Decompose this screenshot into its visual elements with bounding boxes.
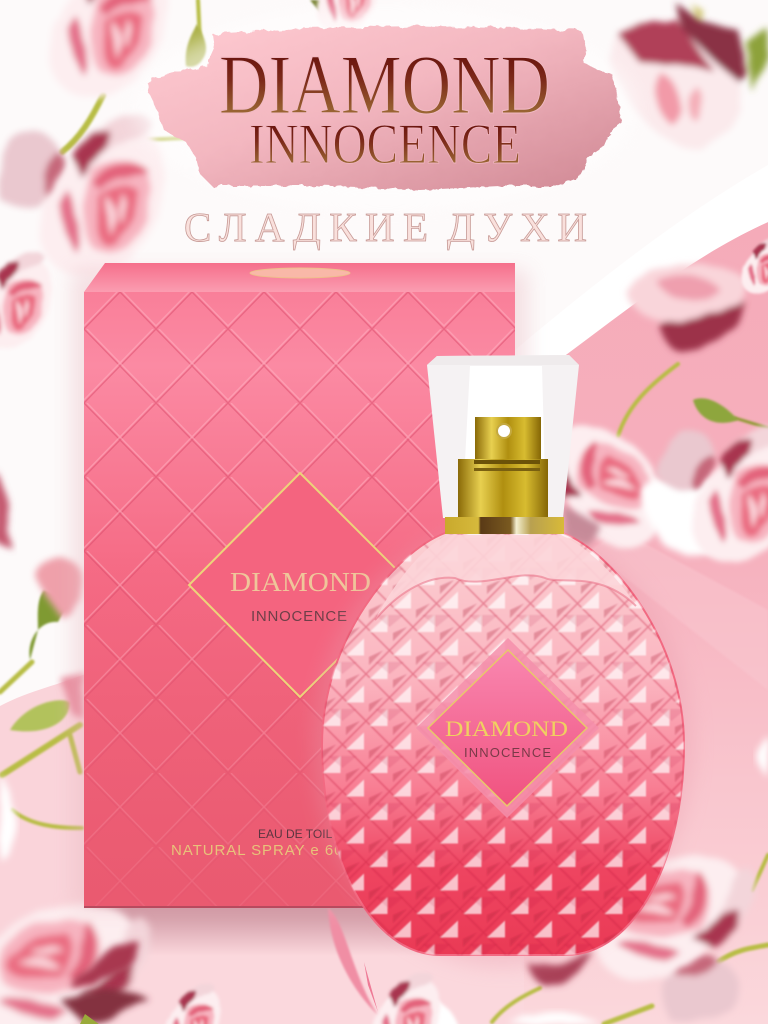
subtitle: СЛАДКИЕ [184, 204, 428, 250]
flower: right edge low [757, 736, 768, 778]
flower: left large [0, 114, 165, 276]
title [219, 38, 550, 176]
cap [427, 355, 579, 518]
bottle body [313, 523, 693, 967]
flower: bottom dark bud [527, 950, 592, 985]
flower: right middle [625, 263, 746, 352]
flower: behind bottle [518, 411, 684, 558]
box gold diamond [189, 473, 412, 697]
bottle sub-brand: INNOCENCE [464, 745, 551, 760]
flower: top right [610, 2, 768, 150]
icon: green buds [10, 0, 738, 731]
title line: Diamond: DIAMOND [219, 38, 550, 132]
flower: shadow behind bottle [563, 505, 600, 548]
subtitle [184, 204, 587, 250]
flower: left edge low [0, 775, 15, 860]
flower: right edge [741, 237, 768, 294]
bottle brand name: DIAMOND [445, 716, 568, 741]
flower: bottom right [594, 855, 756, 1021]
box volume text: EAU DE TOILET [258, 827, 348, 841]
flower: bottom centre [371, 972, 460, 1024]
flower: right lower [640, 423, 768, 562]
flower: bottom right small [510, 1012, 600, 1024]
flower: bottom small [164, 983, 221, 1024]
perfume box [72, 263, 528, 910]
flower: top centre [317, 0, 379, 33]
flower: left small [0, 251, 52, 348]
pink swoosh: lower left [0, 672, 90, 1024]
flower: left edge [0, 470, 12, 548]
box sub-brand: INNOCENCE [251, 608, 347, 625]
box top [84, 263, 515, 292]
box volume text: NATURAL SPRAY e 60 m [171, 842, 361, 859]
collar ring [445, 517, 564, 534]
bottle gem label [416, 638, 599, 818]
flower: left bud [36, 558, 82, 618]
subtitle: ДУХИ [447, 204, 587, 250]
flower: bottom left [0, 904, 151, 1024]
box brand name: DIAMOND [230, 567, 371, 597]
box front [84, 292, 515, 907]
pink swoosh: right side [516, 222, 768, 1024]
flower: left sliver [62, 672, 84, 720]
title line: Innocence: INNOCENCE [249, 113, 521, 176]
flower: top left [49, 0, 168, 97]
brush swatch [135, 8, 635, 208]
spray pump [458, 417, 548, 519]
box volume text [171, 827, 361, 859]
perfume bottle [313, 355, 693, 967]
